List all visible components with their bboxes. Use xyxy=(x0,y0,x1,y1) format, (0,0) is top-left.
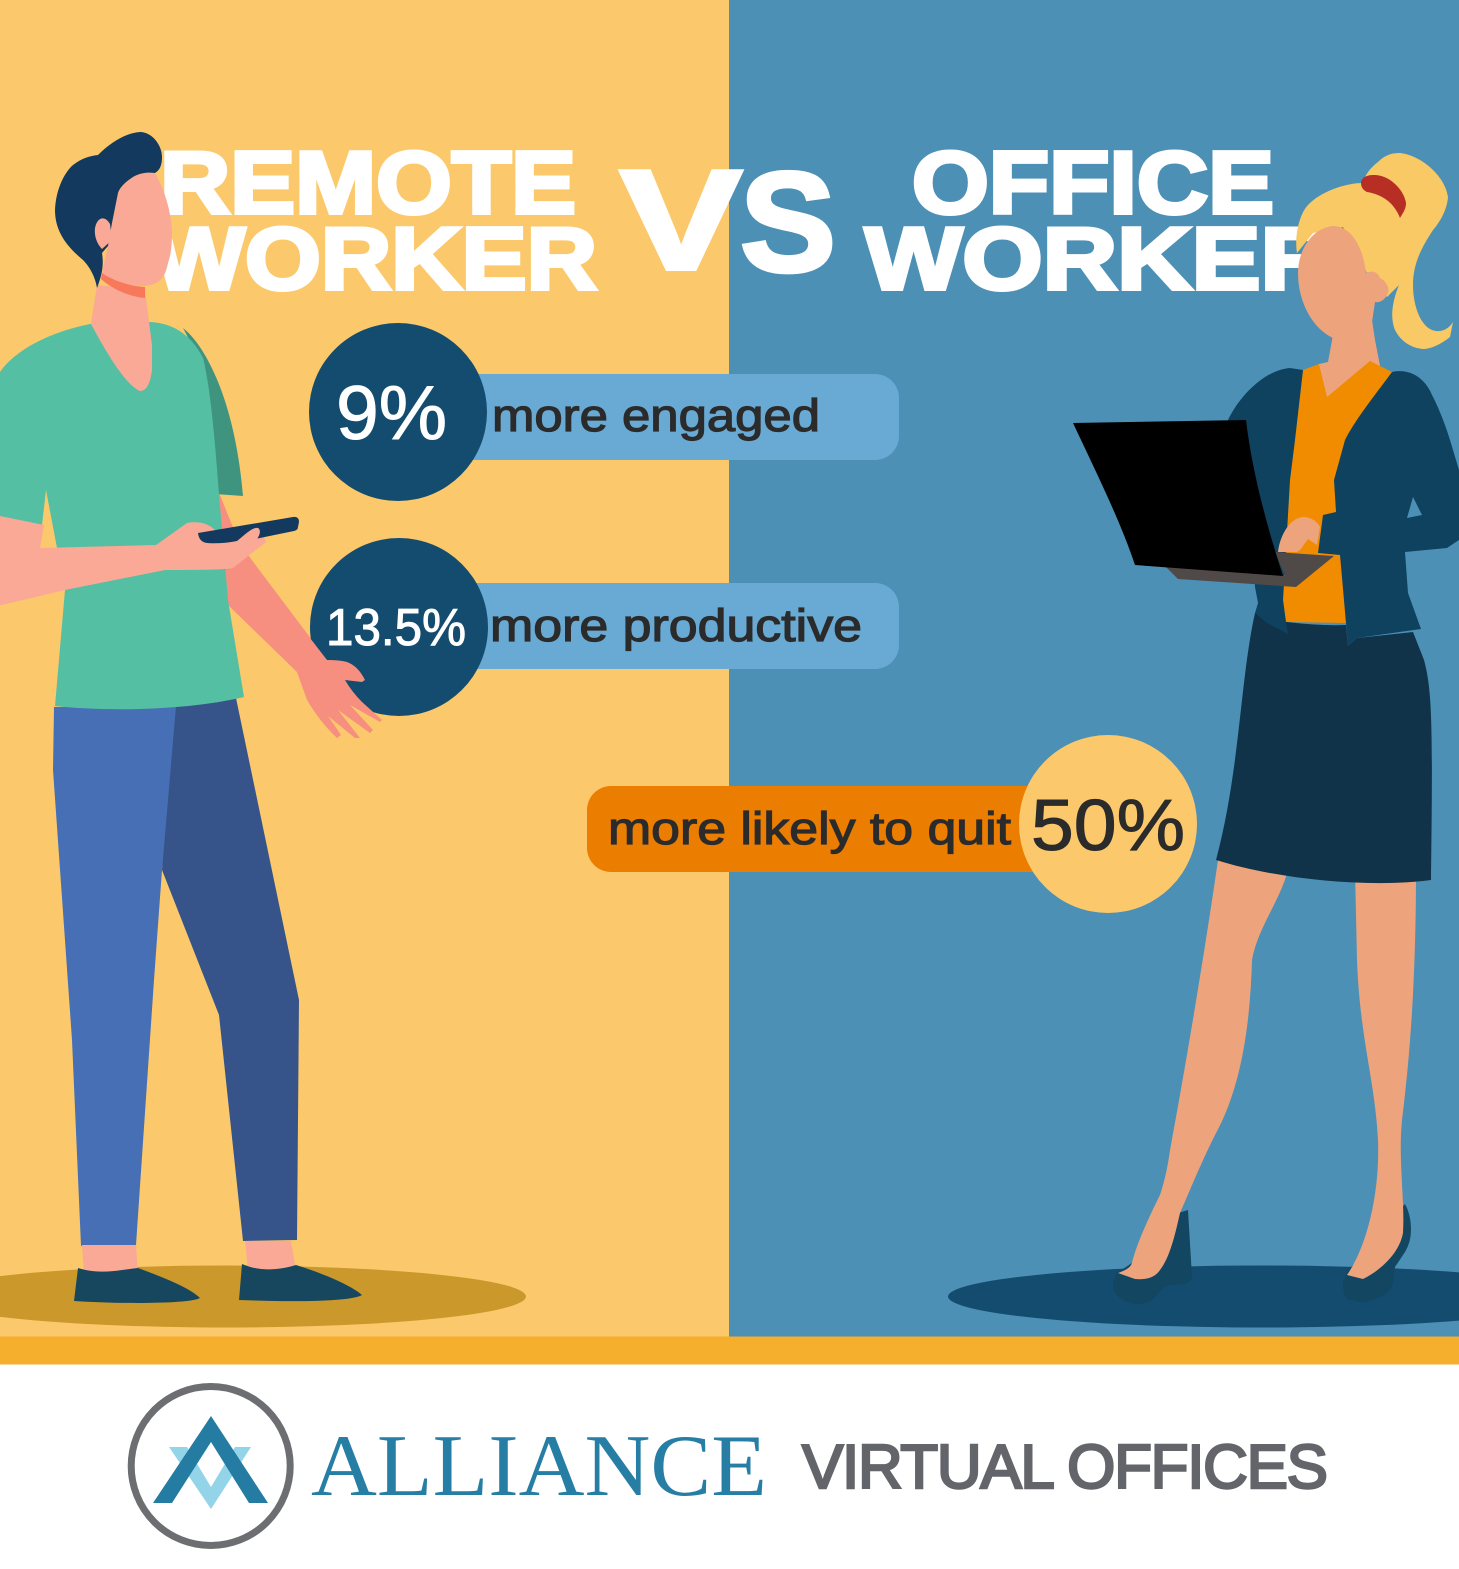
face and ear xyxy=(1298,226,1389,338)
heading: office worker: WORKER xyxy=(865,209,1335,308)
back leg xyxy=(1347,870,1416,1279)
floor shadow: remote worker xyxy=(0,1266,526,1328)
left shoe xyxy=(1113,1210,1192,1304)
phone xyxy=(198,517,299,543)
pill: more productive xyxy=(440,583,899,669)
badge: 50% xyxy=(1019,735,1197,913)
right shoe xyxy=(1343,1204,1411,1302)
laptop base xyxy=(1165,552,1334,587)
footer accent band xyxy=(0,1336,1459,1364)
neck xyxy=(91,285,152,391)
shirt sleeve shade xyxy=(183,328,243,496)
orange top xyxy=(1283,361,1392,623)
illustration: office worker xyxy=(1073,153,1459,1304)
back leg xyxy=(162,698,299,1241)
panel: office worker background xyxy=(729,0,1459,1337)
pill: more engaged xyxy=(440,374,899,460)
pill: more engaged: more engaged xyxy=(492,390,820,441)
neck xyxy=(1319,320,1381,405)
collar shadow xyxy=(101,273,145,298)
shoes xyxy=(74,1268,200,1303)
hair xyxy=(55,132,162,288)
logo: ALLIANCE wordmark: ALLIANCE xyxy=(311,1418,767,1515)
skirt xyxy=(1216,613,1432,883)
heading: remote worker: WORKER xyxy=(153,209,597,308)
near arm and hand xyxy=(0,516,266,605)
arm gap xyxy=(1407,497,1422,518)
logo: Alliance mark xyxy=(131,1386,290,1546)
pill: more productive: more productive xyxy=(490,600,862,651)
badge: 13.5%: 13.5% xyxy=(326,599,466,657)
heading: office worker: OFFICE xyxy=(912,133,1274,232)
front leg xyxy=(1118,860,1290,1279)
heading: office worker xyxy=(865,133,1335,308)
hair and ponytail xyxy=(1296,153,1453,349)
floor shadow: office worker xyxy=(948,1266,1459,1328)
thumb over phone xyxy=(237,528,260,546)
jacket right panel xyxy=(1318,371,1459,646)
hand xyxy=(1278,517,1320,552)
far arm xyxy=(218,490,340,705)
ankles xyxy=(82,1245,138,1274)
badge: 50%: 50% xyxy=(1031,786,1185,866)
illustration: remote worker xyxy=(0,132,362,1303)
pill: more likely to quit xyxy=(587,786,1087,872)
remote worker hand over badge xyxy=(280,625,382,738)
heading: VS: V xyxy=(620,141,742,300)
badge: 13.5% xyxy=(310,538,488,716)
hair tie xyxy=(1361,175,1406,218)
face xyxy=(102,172,172,286)
shirt xyxy=(0,322,244,709)
laptop screen xyxy=(1073,420,1283,576)
ear xyxy=(95,218,112,249)
badge: 9%: 9% xyxy=(336,371,447,456)
pill: more likely to quit: more likely to quit xyxy=(608,803,1012,854)
heading: VS: S xyxy=(740,143,836,302)
jacket left panel xyxy=(1228,368,1303,634)
logo: VIRTUAL OFFICES: VIRTUAL OFFICES xyxy=(802,1433,1328,1502)
heading: remote worker: REMOTE xyxy=(160,133,576,232)
front leg xyxy=(53,706,176,1246)
heading: VS xyxy=(620,141,836,302)
badge: 9% xyxy=(309,323,487,501)
heading: remote worker xyxy=(153,133,597,308)
panel: remote worker background xyxy=(0,0,729,1337)
